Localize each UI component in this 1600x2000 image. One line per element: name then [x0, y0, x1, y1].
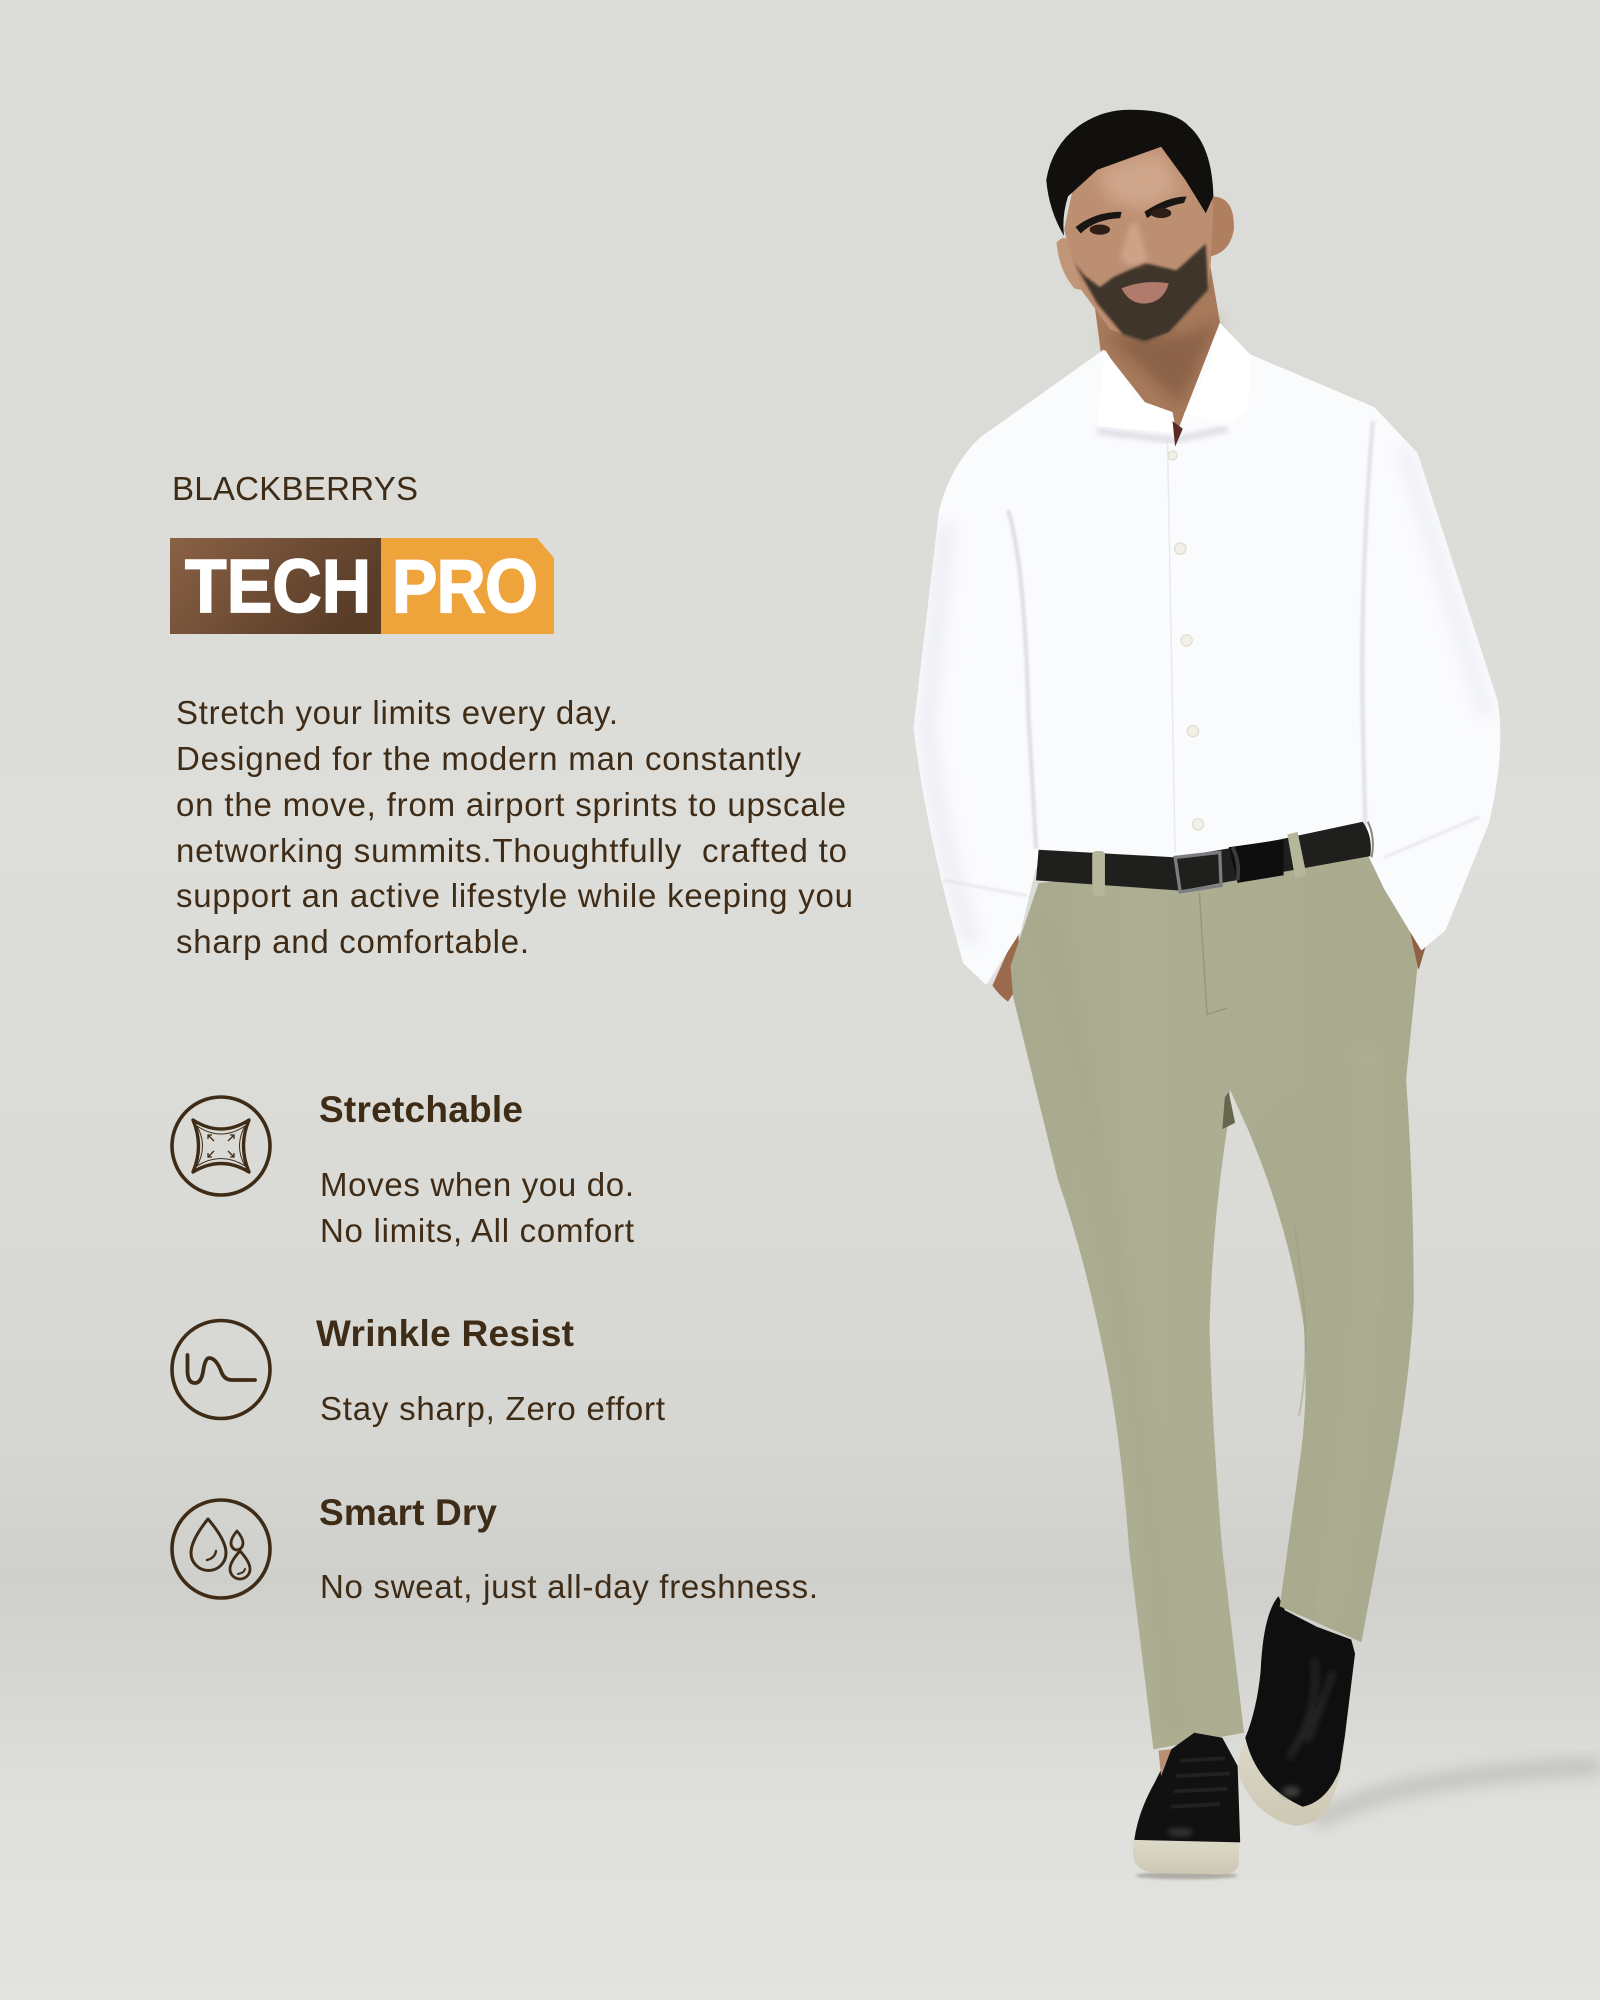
buttons	[1168, 451, 1204, 830]
feature: wrinkle resist: Stay sharp, Zero effort	[320, 1390, 665, 1427]
logo: tech pro	[170, 538, 554, 634]
face	[1056, 134, 1234, 342]
belt loops	[1092, 832, 1307, 896]
feature: stretchable: Moves when you do.	[320, 1166, 634, 1203]
collar	[1097, 323, 1252, 447]
intro paragraph: Designed for the modern man constantly	[176, 740, 802, 777]
neck	[1095, 262, 1225, 447]
front leg and waist trousers	[1011, 852, 1418, 1749]
feature: wrinkle resist: Wrinkle Resist	[316, 1313, 574, 1354]
icon: water drops	[172, 1500, 270, 1598]
hair	[1046, 110, 1213, 236]
hands	[970, 901, 1432, 1002]
intro paragraph: networking summits.Thoughtfully crafted to	[176, 832, 847, 869]
shirt shading	[926, 421, 1486, 944]
intro paragraph: support an active lifestyle while keeping you	[176, 877, 853, 914]
intro paragraph: sharp and comfortable.	[176, 923, 529, 960]
icon: stretch	[172, 1097, 270, 1195]
feature: wrinkle resist	[316, 1313, 665, 1427]
feature: smart dry: Smart Dry	[319, 1492, 497, 1533]
brand name: BLACKBERRYS	[172, 470, 418, 507]
trouser details	[1046, 893, 1370, 1735]
logo: tech pro: TECH	[185, 545, 371, 629]
model figure	[914, 110, 1600, 1880]
feature: stretchable: No limits, All comfort	[320, 1212, 634, 1249]
icon: wrinkle wave	[172, 1320, 270, 1418]
shirt	[914, 323, 1500, 985]
back leg trousers	[1233, 1021, 1414, 1642]
neck shadow	[1105, 319, 1220, 406]
shadow under front shoe	[1136, 1872, 1238, 1879]
feature: stretchable: Stretchable	[319, 1089, 523, 1130]
intro paragraph: on the move, from airport sprints to upscale	[176, 786, 846, 823]
belt	[1036, 822, 1373, 892]
feature: stretchable	[319, 1089, 634, 1249]
intro paragraph: Stretch your limits every day.	[176, 694, 618, 731]
feature: smart dry: No sweat, just all-day freshness.	[320, 1568, 818, 1605]
left shoe	[1133, 1733, 1240, 1874]
feature: smart dry	[319, 1492, 818, 1605]
floor shadow	[1314, 1766, 1600, 1822]
intro paragraph	[176, 694, 853, 960]
right shoe	[1238, 1596, 1355, 1826]
logo: tech pro: PRO	[392, 545, 538, 629]
